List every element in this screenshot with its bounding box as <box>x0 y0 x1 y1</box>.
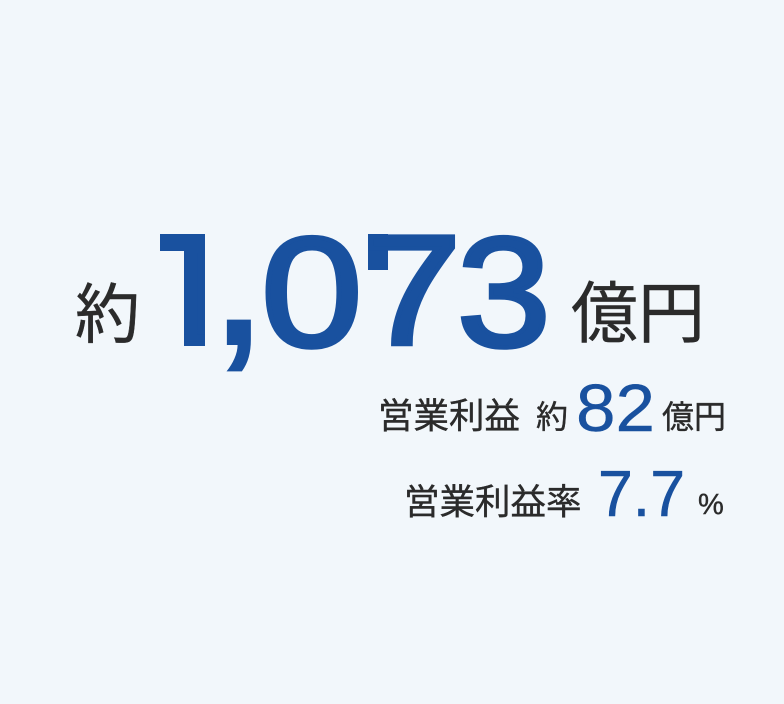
label 営業利益率: 営業利益率 <box>404 482 582 522</box>
profit figure: 82 <box>576 371 655 446</box>
revenue figure: 3 <box>457 206 551 380</box>
operating profit row <box>378 371 726 446</box>
revenue figure <box>160 234 546 372</box>
infographic panel <box>76 234 724 518</box>
headline: revenue about 1,073 oku yen <box>76 234 700 372</box>
unit 億円: 億円 <box>571 277 705 352</box>
prefix 約: 約 <box>536 399 568 435</box>
revenue figure: 7 <box>362 203 461 377</box>
margin figure: 7.7 <box>598 457 685 530</box>
prefix 約: 約 <box>75 278 140 351</box>
operating margin row <box>404 457 724 530</box>
revenue figure: , <box>215 192 262 382</box>
percent sign: % <box>698 489 724 521</box>
unit 億円: 億円 <box>662 399 726 435</box>
label 営業利益: 営業利益 <box>378 396 520 436</box>
revenue figure: 1 <box>137 204 240 378</box>
revenue figure: 0 <box>261 204 363 379</box>
